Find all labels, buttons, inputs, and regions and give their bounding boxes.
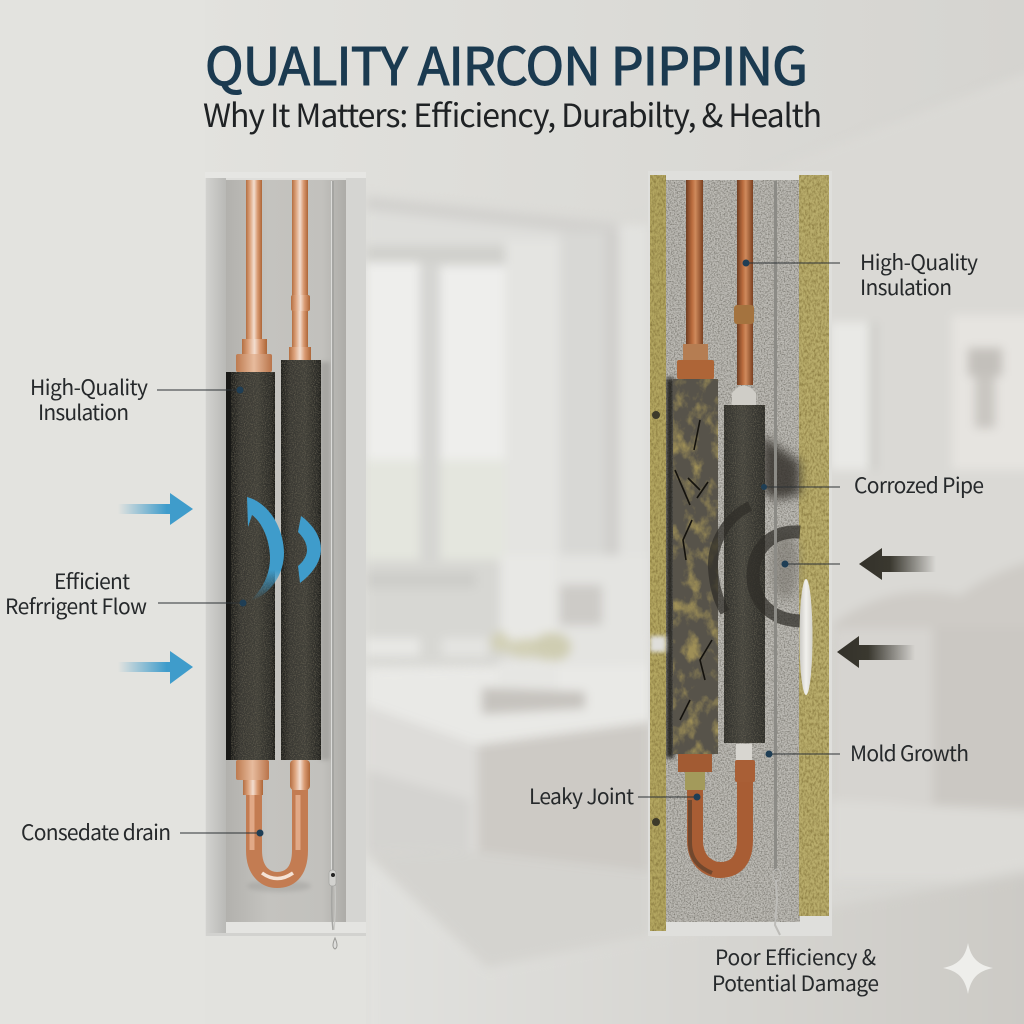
- label: high-quality insulation right: High-Quality: [860, 247, 978, 277]
- label: poor efficiency and damage: [712, 942, 879, 998]
- table faces: [478, 722, 650, 872]
- label: condensate drain: Consedate drain: [21, 817, 171, 847]
- title: QUALITY AIRCON PIPPING: [205, 25, 808, 100]
- flow arc left: [247, 497, 284, 601]
- label: high-quality insulation right: [860, 247, 978, 302]
- label: efficient refrigerant flow: Efficient: [54, 566, 130, 596]
- faded dark arcs: [713, 506, 800, 621]
- right side sofa: [832, 555, 1024, 830]
- corroded U-bend: [678, 744, 755, 873]
- mould stain: [762, 435, 800, 600]
- label: poor efficiency and damage: Potential Damage: [712, 968, 879, 998]
- fibre insulation left: [650, 175, 666, 931]
- drain wire: [329, 181, 337, 949]
- lower window band: [366, 560, 506, 665]
- wall frame and backing: [648, 171, 832, 936]
- label: leaky joint: Leaky Joint: [529, 781, 634, 811]
- right side window and picture: [830, 322, 870, 470]
- label: poor efficiency and damage: Poor Efficiency &: [715, 942, 876, 972]
- ceiling to wall transition: [366, 60, 1024, 640]
- label leader lines and dots: [157, 386, 264, 836]
- flow arc right: [298, 516, 321, 583]
- panel: poor installation: [638, 171, 840, 936]
- label: corroded pipe: Corrozed Pipe: [854, 470, 984, 500]
- subtitle: Why It Matters: Efficiency, Durabilty, & Health: [203, 91, 822, 137]
- arrow: heat in upper: [859, 548, 936, 580]
- arrow: airflow in upper: [118, 493, 193, 525]
- insulation right: [724, 405, 765, 743]
- white damp patch: [800, 579, 812, 695]
- arrow: heat in lower: [837, 636, 915, 668]
- white gap in insulation: [650, 636, 666, 652]
- label: efficient refrigerant flow: Refrrigent Flow: [5, 591, 147, 621]
- arrow: airflow in lower: [118, 651, 193, 684]
- corroded insulation left: [673, 379, 718, 754]
- corroded copper right: [732, 180, 756, 405]
- drain wire poor: [773, 181, 781, 935]
- copper U-bend drain: [236, 760, 310, 880]
- panel: good installation: [157, 172, 366, 949]
- wall frame: [205, 172, 366, 936]
- corroded copper left: [677, 180, 714, 379]
- label leader lines and dots: [638, 260, 840, 800]
- label: high-quality insulation left: [30, 372, 148, 427]
- copper pipe left: [236, 180, 272, 372]
- rug: [366, 852, 650, 967]
- plain left wall: [0, 0, 205, 1024]
- label: mold growth: Mold Growth: [850, 738, 969, 768]
- icon: sparkle: [943, 943, 993, 994]
- floor: [366, 858, 1024, 1024]
- label: efficient refrigerant flow: [5, 566, 147, 621]
- insulated foam pipes: [231, 360, 321, 760]
- label: high-quality insulation right: Insulation: [860, 272, 952, 302]
- table top: [366, 665, 650, 745]
- screw holes: [652, 411, 660, 826]
- fibre insulation right: [799, 175, 829, 916]
- label: high-quality insulation left: High-Quality: [30, 372, 148, 402]
- copper pipe right: [289, 180, 311, 361]
- flowers: [491, 632, 509, 652]
- label: high-quality insulation left: Insulation: [38, 397, 129, 427]
